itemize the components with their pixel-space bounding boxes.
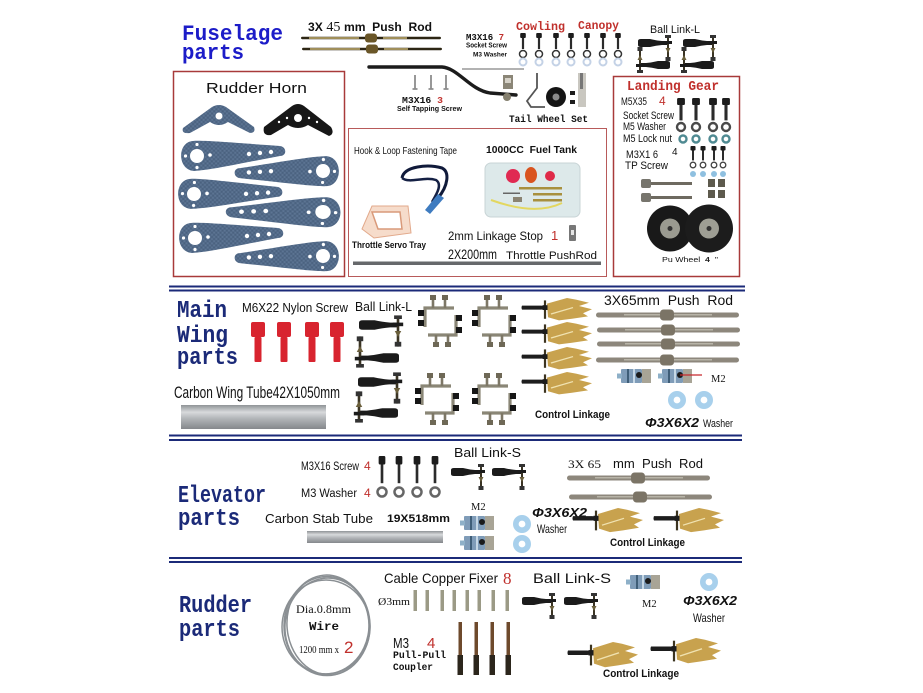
throttle servo tray: Throttle Servo Tray — [352, 240, 426, 250]
tail wheel wire and clamp — [369, 67, 524, 101]
self tapping screws: M3X16 3 — [402, 95, 443, 106]
M2 connector, rudder: M2 — [642, 599, 657, 610]
carbon wing tube: Carbon Wing Tube42X1050mm — [174, 383, 340, 402]
washers, main wing: Washer — [703, 418, 733, 430]
carbon stab tube: 19X518mm — [387, 513, 450, 525]
socket screw labels: M3 Washer — [473, 52, 508, 58]
throttle pushrod: 2X200mm — [448, 247, 497, 262]
blue V horn — [183, 105, 254, 133]
steel wire coil: 1200 mm x — [299, 645, 339, 656]
ball link-S, elevator: Ball Link-S — [454, 445, 521, 460]
copper fixer pins — [378, 569, 512, 611]
carbon wing tube — [174, 383, 340, 429]
linkage stop: 1 — [551, 228, 558, 243]
section: elevator parts — [178, 445, 724, 550]
steel wire coil: Wire — [309, 620, 339, 634]
M2 connectors, elevator — [460, 502, 494, 550]
M2 connectors, main wing: M2 — [711, 374, 726, 385]
control linkages, main wing — [522, 298, 610, 421]
wheel label: Pu Wheel 4 " — [662, 257, 719, 264]
carbon stab tube: Carbon Stab Tube — [265, 511, 373, 526]
control linkages, rudder — [568, 638, 721, 680]
3X65 push rods, main wing: 3X65mm Push Rod — [604, 292, 733, 308]
landing gear labels: 4 — [659, 94, 666, 108]
M3 screws and washers: 4 — [364, 486, 371, 500]
pull-pull couplers: M3 — [393, 635, 409, 652]
landing gear labels: TP Screw — [625, 160, 668, 172]
M5 socket screws — [677, 98, 730, 120]
nylon screws — [242, 300, 349, 362]
steel wire coil — [280, 572, 374, 678]
heading: main wing parts: parts — [177, 345, 238, 372]
section: fuselage parts — [174, 19, 740, 276]
washer, rudder — [683, 576, 738, 625]
3X65 push rods, elevator: 3X 65 — [568, 457, 601, 471]
linkage stop — [448, 225, 576, 243]
hook and loop tape: Hook & Loop Fastening Tape — [354, 145, 457, 157]
pull-pull couplers: Pull-Pull — [393, 650, 446, 662]
wheels — [647, 204, 733, 252]
ball link-L, main wing: Ball Link-L — [355, 299, 412, 314]
control linkages, main wing: Control Linkage — [535, 409, 610, 421]
heading: main wing parts — [177, 298, 238, 372]
M3 screws and washers: 4 — [364, 459, 371, 473]
panel: rudder horn — [174, 72, 344, 276]
copper fixer pins: Cable Copper Fixer — [384, 570, 498, 586]
pull-pull couplers: Coupler — [393, 662, 433, 674]
heading: main wing parts: Wing — [177, 323, 228, 350]
heading: rudder parts — [179, 593, 252, 644]
panel: landing gear — [614, 76, 740, 276]
M3 screws, washers and blue nuts — [690, 146, 726, 177]
self tapping screws — [397, 75, 462, 113]
heading: elevator parts: parts — [178, 506, 240, 533]
3X65 push rods, elevator: mm Push Rod — [613, 457, 703, 471]
M3 screws and washers — [301, 456, 440, 500]
metal brackets — [415, 295, 516, 425]
heading: rudder horn: Rudder Horn — [206, 80, 307, 97]
M3 screws and washers: M3 Washer — [301, 488, 357, 500]
carbon servo arms — [178, 141, 341, 272]
washer, rudder: Washer — [693, 611, 725, 625]
nylon screws: M6X22 Nylon Screw — [242, 300, 349, 315]
3X45 push rods — [301, 20, 442, 54]
landing gear labels: M3X1 6 — [626, 149, 658, 161]
heading: landing gear: Landing Gear — [627, 79, 719, 95]
cowling and canopy labels: Cowling — [516, 20, 565, 34]
control linkages, elevator: Control Linkage — [610, 537, 685, 549]
axle bolts and collars — [641, 179, 725, 202]
washers, elevator — [516, 505, 588, 550]
throttle pushrod: Throttle PushRod — [506, 250, 597, 262]
copper fixer pins: Ø3mm — [378, 596, 410, 608]
socket screw labels: Socket Screw — [466, 40, 507, 50]
control linkages, elevator — [572, 508, 724, 549]
ball link-S, rudder: Ball Link-S — [533, 570, 611, 586]
section divider lines — [169, 286, 745, 563]
carbon stab tube — [265, 511, 450, 543]
hook and loop tape — [354, 145, 457, 214]
socket screws and washers — [520, 33, 622, 66]
heading: rudder parts: parts — [179, 617, 240, 644]
control linkages, rudder: Control Linkage — [603, 668, 679, 680]
M2 connector, rudder — [626, 575, 660, 610]
steel wire coil: 2 — [344, 638, 353, 657]
washer, rudder: Φ3X6X2 — [683, 593, 738, 608]
cowling and canopy labels — [516, 19, 619, 34]
fuel tank: 1000CC Fuel Tank — [486, 144, 577, 156]
ball link-S, elevator — [451, 445, 526, 490]
ball link-L, main wing — [354, 299, 412, 423]
M5 lock nuts — [680, 136, 730, 142]
washers, main wing — [645, 394, 733, 430]
landing gear labels: M5 Lock nut — [623, 133, 672, 145]
throttle servo tray — [352, 206, 426, 250]
pull-pull couplers — [393, 622, 511, 675]
M2 connectors, main wing — [617, 369, 726, 385]
tail wheel set — [509, 73, 588, 126]
heading: elevator parts — [178, 483, 266, 533]
heading: fuselage parts: Fuselage — [182, 22, 283, 47]
heading: elevator parts: Elevator — [178, 483, 266, 510]
throttle pushrod — [353, 247, 601, 265]
landing gear labels: M5X35 — [621, 96, 647, 108]
3X65 push rods, main wing — [596, 292, 740, 366]
cowling and canopy labels: Canopy — [578, 19, 619, 33]
landing gear labels: 4 — [672, 147, 678, 158]
heading: main wing parts: Main — [177, 298, 227, 325]
M5 washers — [677, 123, 730, 131]
tail wheel set: Tail Wheel Set — [509, 114, 588, 126]
steel wire coil: Dia.0.8mm — [296, 602, 352, 616]
pull-pull couplers: 4 — [427, 635, 435, 652]
heading: fuselage parts: parts — [182, 41, 244, 66]
3X65 push rods, elevator — [567, 457, 712, 502]
fuel tank — [485, 144, 580, 217]
ball link-S, rudder — [522, 570, 611, 619]
ball link-L, fuselage: Ball Link-L — [650, 24, 700, 36]
self tapping screws: Self Tapping Screw — [397, 104, 462, 113]
section: rudder parts — [179, 569, 738, 680]
heading: fuselage parts — [182, 22, 283, 66]
socket screw labels — [466, 33, 508, 58]
black V horn — [264, 104, 333, 136]
washers, elevator: Washer — [537, 522, 567, 536]
heading: rudder parts: Rudder — [179, 593, 252, 620]
landing gear labels — [621, 94, 678, 172]
landing gear labels: M5 Washer — [623, 121, 666, 133]
3X45 push rods: 3X 45 mm Push Rod — [308, 20, 432, 35]
socket screw labels: M3X16 7 — [466, 33, 504, 43]
panel: tape, tray and fuel tank — [348, 128, 606, 276]
linkage stop: 2mm Linkage Stop — [448, 229, 543, 243]
M2 connectors, elevator: M2 — [471, 502, 486, 513]
copper fixer pins: 8 — [503, 569, 512, 588]
washers, main wing: Φ3X6X2 — [645, 415, 700, 430]
M3 screws and washers: M3X16 Screw — [301, 461, 360, 473]
landing gear labels: Socket Screw — [623, 110, 674, 122]
washers, elevator: Φ3X6X2 — [532, 505, 588, 520]
ball link-L, fuselage — [636, 24, 717, 73]
section: main wing parts — [174, 292, 740, 430]
